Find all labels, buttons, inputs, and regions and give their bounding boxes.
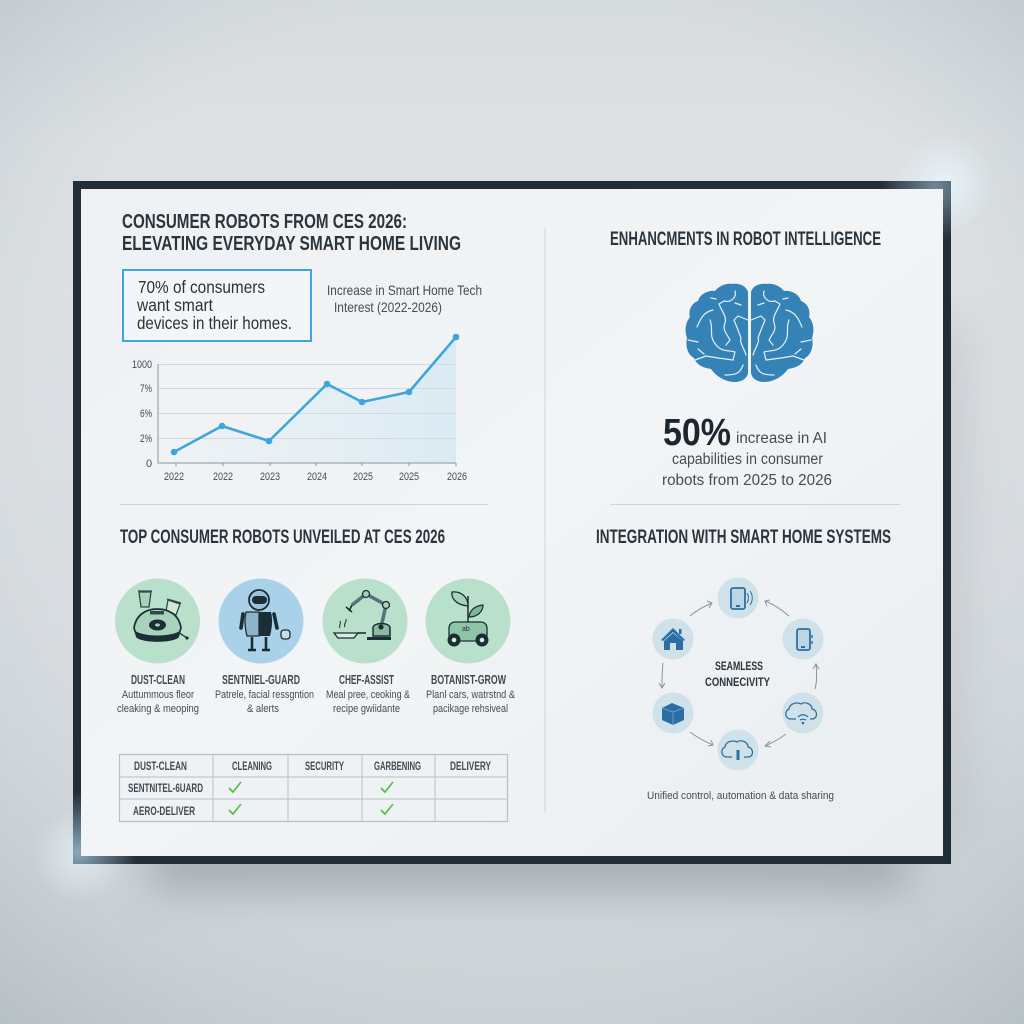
comparison table: DELIVERY: [450, 759, 491, 773]
line chart: 2025: [353, 471, 373, 483]
label: Chef-Assist: Meal pree, ceoking &: [326, 689, 411, 701]
label: Sentinel-Guard: Patrele, facial ressgntion: [215, 689, 314, 701]
robot: Sentinel-Guard: [218, 578, 304, 664]
icon: house: [661, 628, 685, 650]
callout: 70% of consumers: devices in their homes.: [137, 313, 292, 333]
label: Chef-Assist: CHEF-ASSIST: [339, 673, 394, 687]
center label: CONNECIVITY: [705, 675, 770, 689]
robot: Dust-Clean: [115, 578, 200, 664]
callout: 70% of consumers: [123, 270, 311, 341]
arrows: [659, 600, 819, 747]
center label: SEAMLESS: [715, 659, 763, 673]
line chart: 2023: [260, 471, 280, 483]
line chart: 2025: [399, 471, 419, 483]
icon: phone top: [731, 588, 752, 609]
robot: Chef-Assist: [322, 578, 408, 664]
heading: top consumer robots: TOP CONSUMER ROBOTS UNVEILED AT CES 2026: [120, 527, 445, 548]
stat: 50% increase: 50%: [663, 412, 731, 454]
comparison table: AERO-DELIVER: [133, 804, 195, 818]
icon: phone right: [797, 629, 812, 650]
label: Botanist-Grow: pacikage rehsiveal: [433, 703, 508, 715]
comparison table: GARBENING: [374, 759, 421, 773]
label: Dust-Clean: [117, 673, 199, 715]
chart title: Increase in Smart Home Tech: [327, 282, 482, 298]
diagram: connectivity ring: [652, 578, 824, 770]
icon: cloud upload: [722, 741, 752, 760]
title: CONSUMER ROBOTS FROM CES 2026:: [122, 211, 407, 233]
stat: 50% increase: increase in AI: [736, 430, 827, 447]
caption: Unified control, automation & data sharing: [647, 790, 834, 802]
panel: infographic board: [73, 181, 951, 864]
label: Botanist-Grow: Planl cars, watrstnd &: [426, 689, 516, 701]
icon: wifi cloud: [786, 703, 816, 724]
comparison table: [119, 754, 508, 822]
label: Dust-Clean: DUST-CLEAN: [131, 673, 185, 687]
label: Chef-Assist: [326, 673, 411, 715]
comparison table: DUST-CLEAN: [134, 759, 187, 773]
comparison table: SECURITY: [305, 759, 344, 773]
title: [122, 211, 461, 255]
label: Dust-Clean: Auttummous fleor: [122, 689, 194, 701]
callout: 70% of consumers: 70% of consumers: [138, 277, 265, 297]
line chart: 2022: [164, 471, 184, 483]
label: Botanist-Grow: BOTANIST-GROW: [431, 673, 506, 687]
icon: box: [662, 703, 684, 725]
title: ELEVATING EVERYDAY SMART HOME LIVING: [122, 233, 461, 255]
line chart: 0: [146, 458, 152, 470]
label: Dust-Clean: cleaking & meoping: [117, 703, 199, 715]
comparison table: SENTNITEL-6UARD: [128, 781, 203, 795]
label: Sentinel-Guard: SENTNIEL-GUARD: [222, 673, 300, 687]
line chart: [132, 334, 467, 483]
line chart: 1000: [132, 359, 152, 371]
line chart: 6%: [140, 408, 152, 420]
chart title: Interest (2022-2026): [334, 299, 442, 315]
line chart: 2022: [213, 471, 233, 483]
icon: brain: [686, 284, 813, 382]
line chart: 2%: [140, 433, 152, 445]
callout: 70% of consumers: want smart: [136, 295, 213, 315]
label: Botanist-Grow: [426, 673, 516, 715]
center label: [705, 659, 770, 689]
label: Chef-Assist: recipe gwiidante: [333, 703, 400, 715]
robot: Botanist-Grow: [426, 578, 510, 664]
stat: 50% increase: [662, 412, 832, 489]
line chart: 2026: [447, 471, 467, 483]
line chart: 7%: [140, 383, 152, 395]
stat: 50% increase: robots from 2025 to 2026: [662, 472, 832, 489]
label: Sentinel-Guard: [215, 673, 314, 715]
heading: integration: INTEGRATION WITH SMART HOME SYSTEMS: [596, 527, 891, 548]
line chart: 2024: [307, 471, 327, 483]
comparison table: CLEANING: [232, 759, 272, 773]
label: Sentinel-Guard: & alerts: [247, 703, 279, 715]
robot: Botanist-Grow: ab: [462, 626, 470, 633]
chart title: [327, 282, 482, 315]
heading: enhancements: ENHANCMENTS IN ROBOT INTELLIGENCE: [610, 229, 881, 250]
stat: 50% increase: capabilities in consumer: [672, 451, 823, 468]
